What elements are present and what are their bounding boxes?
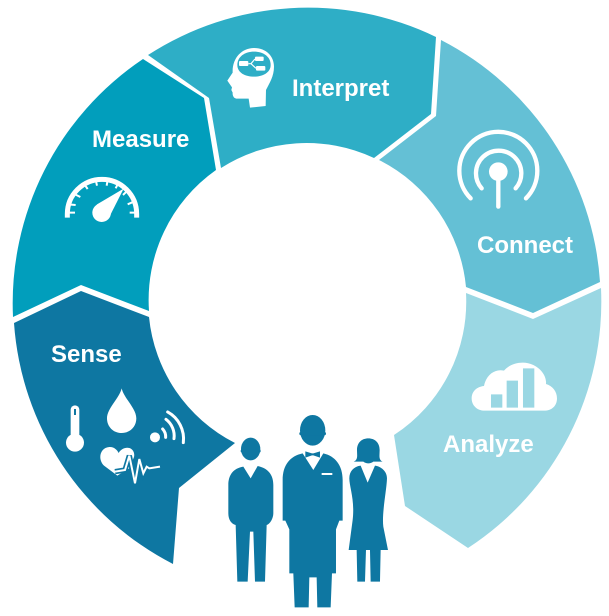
panel: connect <box>379 40 600 313</box>
icon: sensors <box>66 388 184 452</box>
icon: heart with pulse <box>100 447 160 483</box>
icon: wireless signal <box>150 412 184 443</box>
label: Sense: Sense <box>51 341 122 368</box>
figure: left man <box>228 438 273 582</box>
panel: measure <box>13 59 216 317</box>
bow tie <box>305 451 320 458</box>
label: Connect: Connect <box>477 232 573 259</box>
figure: woman <box>349 438 388 582</box>
pocket <box>322 473 332 475</box>
people group <box>228 415 388 607</box>
icon: thermometer <box>66 405 84 452</box>
figure: centre man <box>283 415 343 607</box>
panel: analyze <box>394 288 601 548</box>
icon: cloud with bars <box>472 363 557 411</box>
icon: wireless antenna <box>459 132 537 207</box>
label: Analyze: Analyze <box>443 431 534 458</box>
icon: gauge <box>67 179 137 222</box>
label: Interpret: Interpret <box>292 75 389 102</box>
icon: head with network <box>227 48 274 108</box>
icon: water drop <box>107 388 136 433</box>
label: Measure: Measure <box>92 126 189 153</box>
panel: interpret <box>148 8 436 168</box>
panel: sense <box>14 291 235 564</box>
